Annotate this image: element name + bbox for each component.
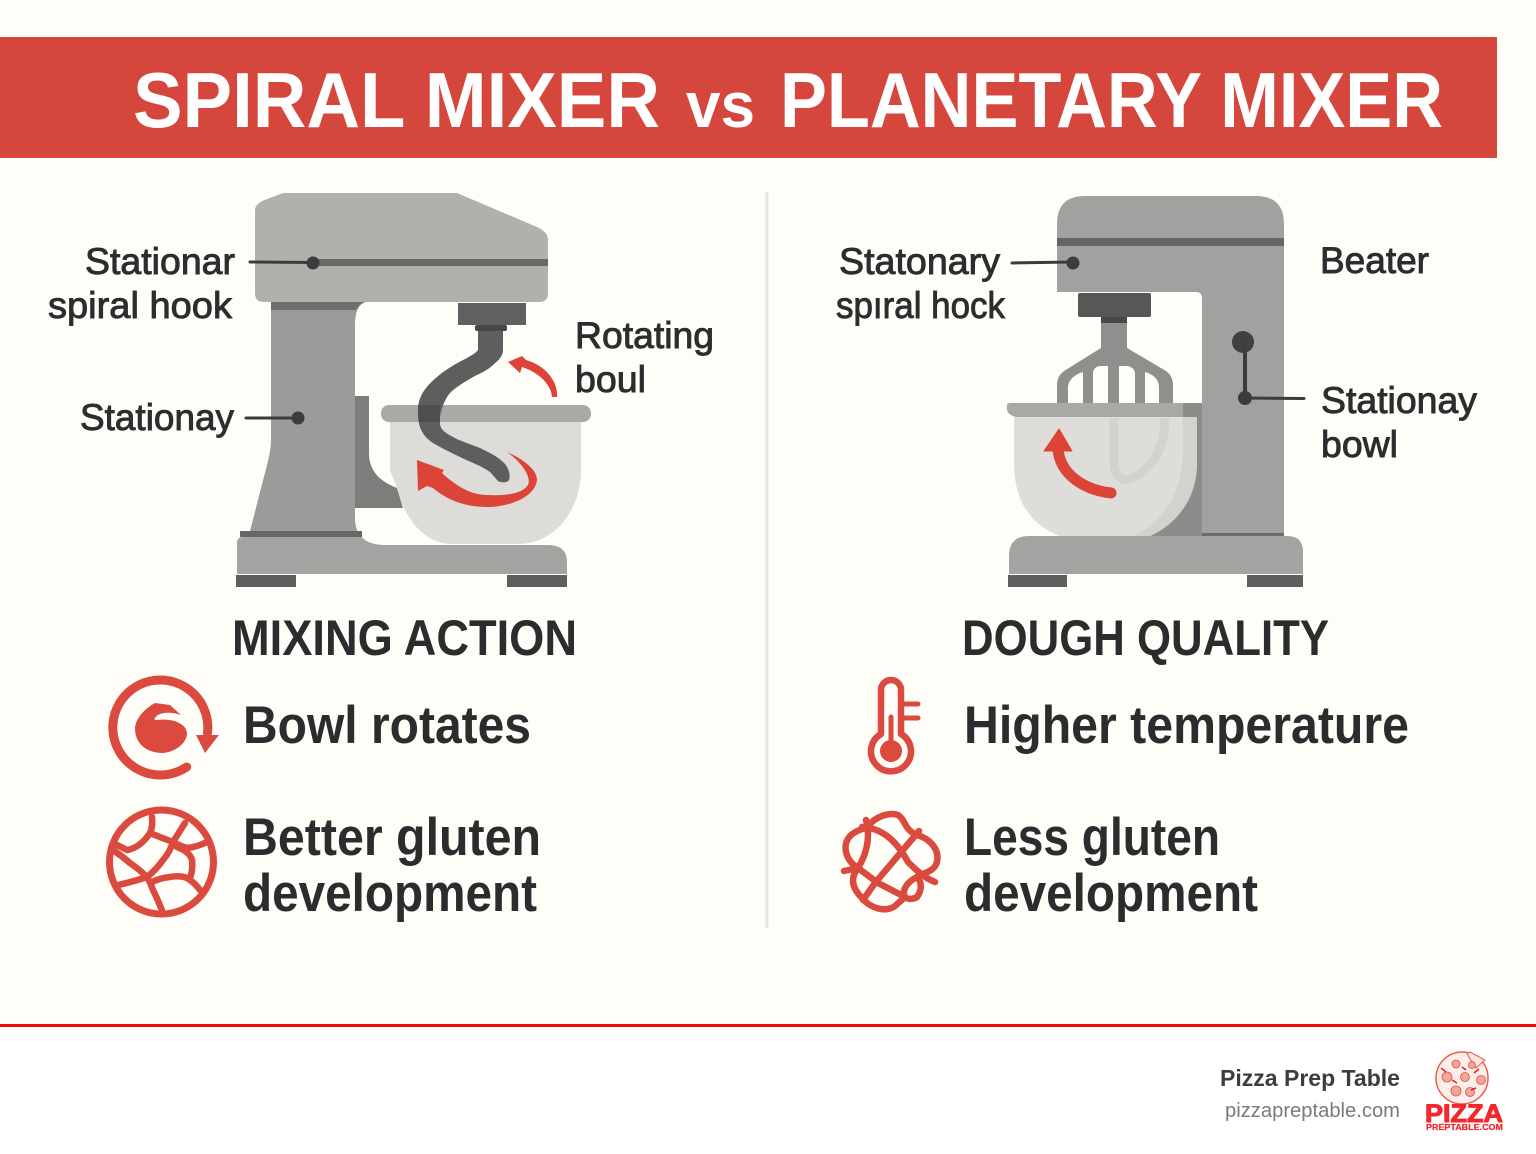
label: beater: Beater (1320, 240, 1429, 281)
text: less gluten development: development (964, 864, 1258, 923)
spiral mixer base (237, 520, 567, 574)
footer url: pizzapreptable.com (1225, 1100, 1400, 1122)
icon: thermometer (871, 680, 918, 771)
planetary feet (1008, 575, 1303, 587)
title banner (0, 37, 1497, 158)
text: better gluten development (243, 808, 541, 923)
flat beater (1057, 323, 1173, 405)
planetary base (1009, 536, 1303, 574)
label: statonary spiral hock: spıral hock (836, 285, 1005, 326)
title: spiral mixer: SPIRAL MIXER (133, 56, 660, 144)
planetary red arrow (1044, 429, 1111, 493)
spiral mixer bracket (355, 396, 403, 508)
leader: stationay (246, 412, 304, 424)
spiral mixer feet (236, 575, 567, 587)
icon: rotating bowl (113, 680, 219, 775)
spiral mixer bowl rim (381, 405, 591, 422)
title: planetary mixer: PLANETARY MIXER (780, 56, 1443, 144)
planetary bowl rim (1007, 403, 1183, 417)
icon: gluten network (110, 810, 214, 914)
logo pizza (1436, 1052, 1488, 1104)
label: stationay: Stationay (80, 397, 234, 438)
label: rotating boul (575, 315, 714, 400)
label: stationay bowl: bowl (1321, 424, 1398, 465)
illustration: spiral mixer (236, 193, 591, 587)
spiral mixer motor hub (458, 303, 526, 325)
leader: statonary spiral hock (1012, 256, 1080, 270)
text: bowl rotates: Bowl rotates (243, 696, 531, 755)
logo (1425, 1052, 1503, 1132)
spiral mixer column (250, 302, 365, 531)
spiral mixer bowl (390, 422, 581, 544)
illustration: planetary mixer (1007, 196, 1303, 587)
footer brand name: Pizza Prep Table (1220, 1065, 1400, 1091)
label: rotating boul: boul (575, 359, 646, 400)
beater seen through bowl (1114, 418, 1165, 479)
top rotation arrow (508, 356, 557, 397)
label: stationar spiral hook: Stationar (85, 241, 235, 282)
swirl arrow (417, 452, 537, 507)
planetary column and head (1057, 196, 1284, 533)
leader: stationay bowl (1232, 331, 1304, 405)
title: vs: vs (686, 69, 755, 141)
label: stationar spiral hook (48, 241, 235, 326)
label: stationay bowl (1321, 380, 1477, 465)
spiral mixer head (255, 193, 548, 302)
text: higher temperature: Higher temperature (964, 696, 1409, 755)
label: statonary spiral hock (836, 241, 1005, 326)
icon: tangled gluten (844, 814, 937, 909)
label: statonary spiral hock: Statonary (839, 241, 1001, 282)
label: stationar spiral hook: spiral hook (48, 285, 233, 326)
heading: dough quality: DOUGH QUALITY (962, 610, 1329, 666)
label: rotating boul: Rotating (575, 315, 714, 356)
text: less gluten development (964, 808, 1258, 923)
planetary bowl (1014, 417, 1197, 536)
logo wordmark: PIZZA (1425, 1100, 1503, 1128)
planetary bowl backing (1110, 403, 1203, 536)
spiral dough hook (418, 331, 510, 482)
leader: stationar spiral hook (250, 256, 320, 270)
text: less gluten development: Less gluten (964, 808, 1220, 867)
logo url: PREPTABLE.COM (1426, 1122, 1503, 1132)
label: stationay bowl: Stationay (1321, 380, 1477, 421)
text: better gluten development: development (243, 864, 537, 923)
text: better gluten development: Better gluten (243, 808, 541, 867)
heading: mixing action: MIXING ACTION (232, 610, 577, 666)
planetary motor hub (1078, 293, 1151, 317)
